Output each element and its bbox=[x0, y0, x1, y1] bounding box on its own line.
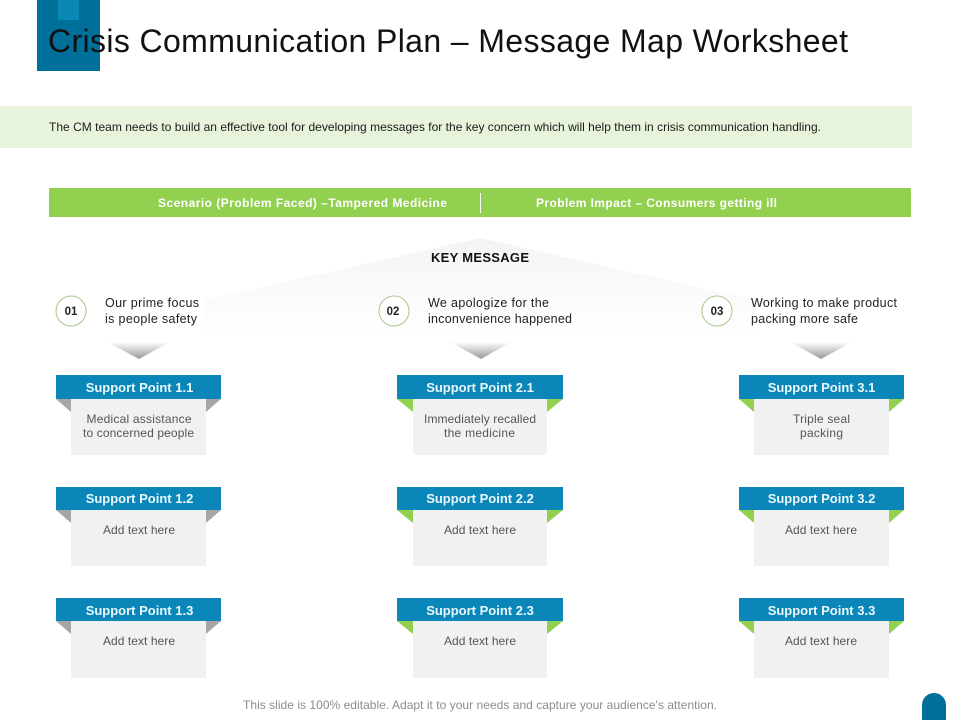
card: support point 1.3 bbox=[56, 598, 221, 678]
icon: title accent square bbox=[37, 0, 100, 71]
intro band bbox=[0, 106, 912, 148]
card: support point 1.1: Medical assistance bbox=[86, 412, 192, 426]
card: support point 3.1: Triple seal bbox=[793, 412, 850, 426]
card: support point 1.1: Support Point 1.1 bbox=[86, 380, 193, 395]
card: support point 1.2 bbox=[56, 487, 221, 566]
card: support point 3.1: packing bbox=[800, 426, 843, 440]
card: support point 3.3: Add text here bbox=[785, 634, 857, 648]
card: support point 3.2 bbox=[739, 487, 904, 566]
card: support point 1.2: Add text here bbox=[103, 523, 175, 537]
key message 03 bbox=[702, 296, 898, 326]
key message 03: 03 bbox=[711, 306, 723, 318]
card: support point 2.3: Add text here bbox=[444, 634, 516, 648]
key message 02: inconvenience happened bbox=[428, 312, 572, 326]
card: support point 2.2 bbox=[397, 487, 563, 566]
arrow 3 bbox=[790, 342, 852, 359]
footer note: This slide is 100% editable. Adapt it to your needs and capture your audience's attention. bbox=[243, 698, 717, 712]
card: support point 2.1: Immediately recalled bbox=[424, 412, 536, 426]
card: support point 1.1: to concerned people bbox=[83, 426, 194, 440]
key message 01: Our prime focus bbox=[105, 296, 199, 310]
card: support point 2.3 bbox=[397, 598, 563, 678]
key message 03: Working to make product bbox=[751, 296, 898, 310]
card: support point 3.3 bbox=[739, 598, 904, 678]
card: support point 3.1: Support Point 3.1 bbox=[768, 380, 875, 395]
title: Crisis Communication Plan – Message Map Worksheet bbox=[48, 23, 848, 59]
key message 01: is people safety bbox=[105, 312, 198, 326]
card: support point 2.3: Support Point 2.3 bbox=[426, 603, 534, 618]
key message 02: 02 bbox=[387, 306, 399, 318]
card: support point 1.1 bbox=[56, 375, 221, 455]
key message 03: packing more safe bbox=[751, 312, 858, 326]
scenario banner: Problem Impact – Consumers getting ill bbox=[536, 196, 777, 210]
arrow 2 bbox=[450, 342, 511, 359]
key message 01: 01 bbox=[65, 306, 78, 318]
icon: page tab bbox=[922, 693, 946, 720]
key message 02: We apologize for the bbox=[428, 296, 549, 310]
card: support point 2.2: Support Point 2.2 bbox=[426, 491, 534, 506]
key message 02 bbox=[379, 296, 572, 326]
card: support point 3.2: Add text here bbox=[785, 523, 857, 537]
card: support point 1.3: Add text here bbox=[103, 634, 175, 648]
intro band: The CM team needs to build an effective tool for developing messages for the key concern which will help them in crisis communication handling. bbox=[49, 120, 821, 134]
key message fan background bbox=[205, 238, 755, 335]
scenario banner: Scenario (Problem Faced) –Tampered Medicine bbox=[158, 196, 447, 210]
card: support point 3.1 bbox=[739, 375, 904, 455]
card: support point 3.3: Support Point 3.3 bbox=[768, 603, 875, 618]
arrow 1 bbox=[107, 342, 170, 359]
card: support point 1.2: Support Point 1.2 bbox=[86, 491, 193, 506]
card: support point 2.1: Support Point 2.1 bbox=[426, 380, 534, 395]
card: support point 2.1: the medicine bbox=[444, 426, 515, 440]
card: support point 2.1 bbox=[397, 375, 563, 455]
card: support point 1.3: Support Point 1.3 bbox=[86, 603, 193, 618]
scenario banner bbox=[49, 188, 911, 217]
key message heading: KEY MESSAGE bbox=[431, 250, 529, 265]
card: support point 2.2: Add text here bbox=[444, 523, 516, 537]
key message 01 bbox=[56, 296, 199, 326]
card: support point 3.2: Support Point 3.2 bbox=[768, 491, 875, 506]
